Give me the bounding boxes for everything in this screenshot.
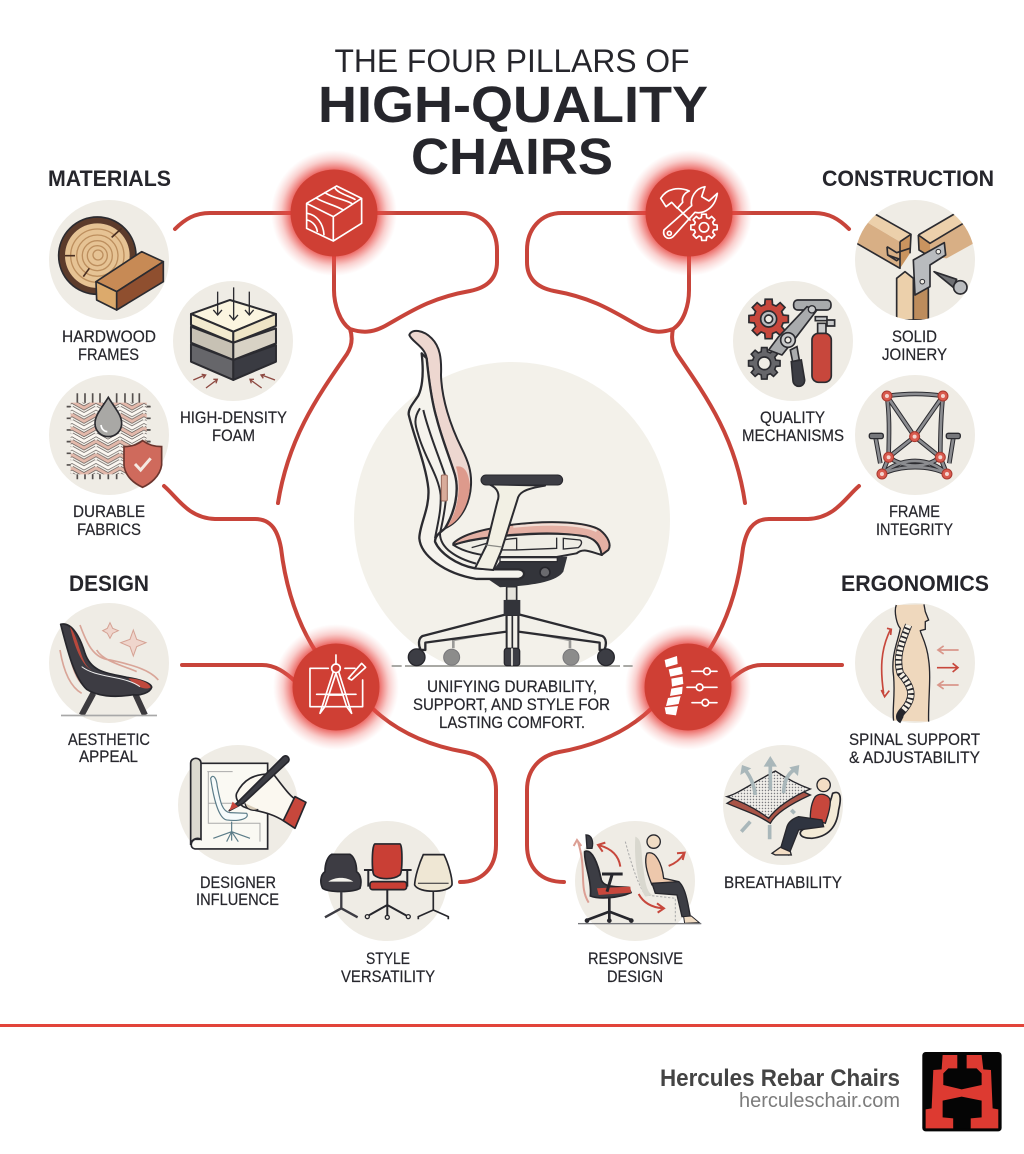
heading: design: DESIGN: [69, 571, 149, 596]
hub: ergonomics: [625, 624, 751, 750]
label: FRAMES: [78, 346, 139, 364]
label: FABRICS: [77, 521, 141, 539]
icon: hammer wrench gear: [661, 187, 717, 240]
central backdrop circle: [354, 362, 670, 678]
connector lines: design branches: [182, 665, 496, 882]
footer brand text: Hercules Rebar Chairs: [660, 1065, 900, 1092]
footer brand text: [660, 1065, 900, 1112]
item: breathability: [723, 745, 843, 892]
connector lines: ergonomics branches: [527, 665, 842, 882]
item: hardwood frames: [49, 200, 169, 364]
icon: compass and drawing board: [310, 655, 366, 713]
hub: design: [273, 624, 399, 750]
connector lines: materials: [175, 213, 497, 503]
label: RESPONSIVE: [588, 950, 683, 968]
label: BREATHABILITY: [724, 874, 842, 892]
item: solid joinery: [853, 200, 977, 364]
label: HARDWOOD: [62, 328, 156, 346]
center caption: [413, 678, 610, 732]
heading: construction: CONSTRUCTION: [822, 166, 994, 191]
title: CHAIRS: [411, 128, 613, 185]
label: QUALITY: [760, 409, 825, 427]
label: SPINAL SUPPORT: [849, 731, 980, 749]
connector lines: fabrics to design hub: [164, 486, 318, 655]
icon: gears, arm, gas cylinder: [749, 299, 835, 386]
icon: spine and sliders: [665, 656, 717, 715]
label: MECHANISMS: [742, 427, 844, 445]
label: APPEAL: [79, 748, 138, 766]
label: FRAME: [889, 503, 940, 521]
label: DESIGN: [607, 968, 663, 986]
item: style versatility: [321, 821, 452, 986]
icon: three chairs: [321, 844, 452, 919]
center caption: LASTING COMFORT.: [439, 714, 585, 732]
item: responsive design: [574, 821, 701, 986]
title: [318, 43, 708, 185]
heading: materials: MATERIALS: [48, 166, 171, 191]
footer logo: [922, 1052, 1002, 1131]
icon: breathable mesh and seated person: [727, 756, 840, 855]
icon: foam layers: [191, 287, 276, 388]
icon: chair frame structure: [869, 391, 960, 479]
icon: adjustable chair and person: [574, 835, 701, 924]
label: HIGH-DENSITY: [180, 409, 287, 427]
label: AESTHETIC: [68, 731, 150, 749]
item: designer influence: [178, 745, 306, 909]
label: VERSATILITY: [341, 968, 435, 986]
icon: lounge chair and sparkles: [60, 623, 158, 716]
icon: blueprint and hand with pen: [191, 756, 306, 849]
label: DURABLE: [73, 503, 145, 521]
center caption: UNIFYING DURABILITY,: [427, 678, 597, 696]
label: STYLE: [366, 950, 410, 968]
heading: ergonomics: ERGONOMICS: [841, 571, 989, 596]
item: spinal support and adjustability: [849, 603, 980, 767]
icon: spine silhouette: [881, 604, 959, 722]
label: SOLID: [892, 328, 937, 346]
footer brand text: herculeschair.com: [739, 1090, 900, 1112]
footer divider: [0, 1024, 1024, 1027]
label: JOINERY: [882, 346, 947, 364]
connector lines: frame to ergonomics hub: [706, 486, 859, 655]
label: FOAM: [212, 427, 255, 445]
label: INTEGRITY: [876, 521, 953, 539]
title: THE FOUR PILLARS OF: [334, 43, 690, 79]
item: aesthetic appeal: [49, 603, 169, 766]
icon: wood joint and bracket: [853, 214, 977, 320]
title: HIGH-QUALITY: [318, 76, 708, 133]
hub: construction: [626, 150, 752, 276]
central office chair: [392, 331, 633, 666]
label: & ADJUSTABILITY: [849, 749, 980, 767]
chair seat, back and armrest: [409, 331, 610, 587]
icon: log and beam: [59, 217, 163, 310]
connector lines: construction: [527, 213, 849, 503]
item: frame integrity: [855, 375, 975, 539]
chair base: [392, 587, 633, 666]
center caption: SUPPORT, AND STYLE FOR: [413, 696, 610, 714]
item: high-density foam: [173, 281, 293, 445]
label: INFLUENCE: [196, 891, 279, 909]
item: durable fabrics: [49, 375, 169, 539]
item: quality mechanisms: [733, 281, 853, 445]
hub: materials: [271, 150, 397, 276]
icon: woven fabric, droplet, shield: [67, 393, 162, 487]
label: DESIGNER: [200, 874, 276, 892]
icon: wood block: [307, 186, 362, 241]
